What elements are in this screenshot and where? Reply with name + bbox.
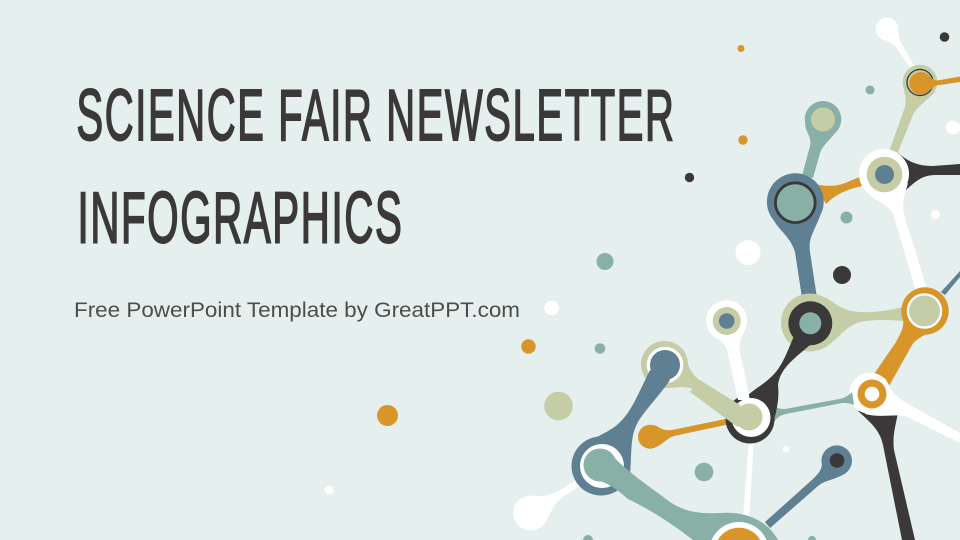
molecule: central cluster [513,300,832,540]
blue node, stem and head [572,347,683,496]
molecule: middle-right cluster [743,271,960,540]
node: sage and blue [867,157,902,192]
orange blob with tail [638,418,730,449]
title [76,75,676,258]
white line down [743,440,754,518]
title: INFOGRAPHICS [78,178,404,258]
sage head and tail over dark node [690,380,762,430]
teal blob with stem [802,101,841,178]
white node with stem [706,300,750,400]
scattered dots [324,32,960,540]
blue node with stem [767,173,824,298]
dark node stem and ring [726,301,832,444]
orange small node [858,380,886,408]
white stem to orange node [859,149,928,295]
orange connector [815,176,862,204]
white blob bottom left [513,479,581,530]
teal stem to bottom node [584,448,778,540]
white node and tail [849,373,960,443]
blue thin line right [941,271,960,295]
dark connector, right [894,150,960,190]
subtitle: Free PowerPoint Template by GreatPPT.com [74,299,520,322]
sage node with stem [781,294,904,352]
dark stem lower right [858,411,915,540]
sage node with tail [641,341,720,404]
blue small blob with tail [765,445,852,528]
white blob with stem, top [876,18,914,68]
sage node and stem [886,65,937,162]
orange node with stem [870,287,949,395]
teal thin connector [772,392,854,424]
bottom orange node [712,522,766,540]
molecule: top-right cluster [767,18,960,298]
orange node top right [906,69,960,96]
